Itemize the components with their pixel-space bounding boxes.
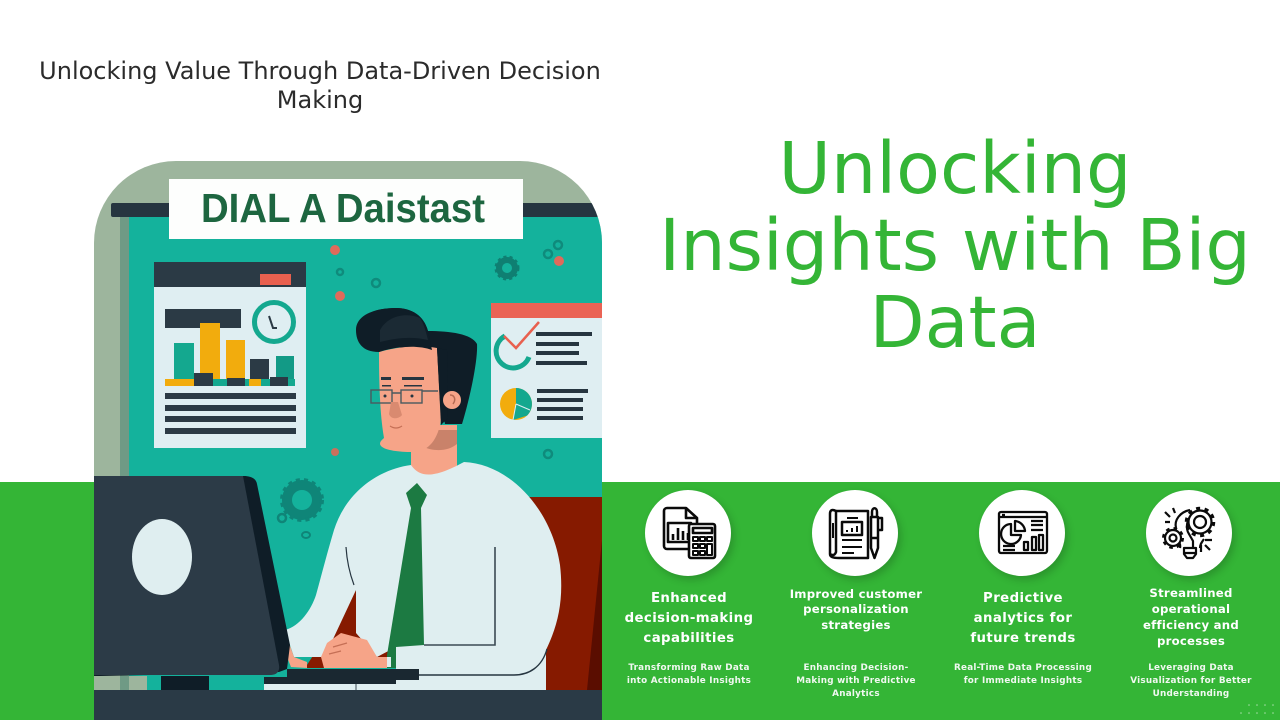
description 1 — [627, 662, 751, 686]
laptop — [94, 476, 290, 676]
heading 1: capabilities — [643, 631, 735, 646]
subtitle heading: Making — [277, 86, 363, 114]
checklist panel — [491, 303, 602, 438]
chair — [305, 497, 602, 690]
description 2: Making with Predictive — [796, 676, 916, 686]
heading 2: personalization — [803, 602, 909, 616]
sign — [169, 179, 523, 239]
description 4: Understanding — [1153, 688, 1229, 698]
heading 3: Predictive — [983, 590, 1063, 606]
subtitle heading: Unlocking Value Through Data-Driven Decision — [39, 57, 601, 85]
heading 4: efficiency and — [1143, 618, 1239, 632]
heading 1 — [625, 590, 753, 646]
keyboard — [264, 669, 419, 684]
description 2 — [796, 662, 916, 698]
main title: Insights with Big — [659, 204, 1251, 287]
card 2 — [790, 490, 922, 698]
heading 3 — [970, 590, 1076, 646]
description 3: for Immediate Insights — [964, 676, 1082, 686]
description 2: Analytics — [832, 688, 880, 698]
heading 4 — [1143, 586, 1239, 648]
description 1: Transforming Raw Data — [628, 662, 750, 672]
heading 2 — [790, 586, 922, 632]
description 4: Leveraging Data — [1148, 662, 1234, 672]
card 4 — [1130, 490, 1252, 698]
heading 4: processes — [1157, 634, 1225, 648]
description 2: Enhancing Decision- — [803, 662, 909, 672]
desk strip and desk — [94, 676, 602, 720]
dashboard panel — [154, 262, 306, 448]
icon: analytics window — [979, 490, 1065, 576]
icon: document and pen — [812, 490, 898, 576]
main title: Unlocking — [778, 127, 1132, 210]
man — [264, 308, 561, 690]
icon: report and calculator — [645, 490, 731, 576]
description 1: into Actionable Insights — [627, 676, 751, 686]
background gears and dots — [278, 241, 564, 538]
main title: Data — [870, 281, 1040, 364]
main title — [659, 127, 1251, 364]
subtitle heading — [39, 57, 601, 114]
green band — [0, 482, 1280, 720]
description 3 — [954, 662, 1092, 686]
description 4: Visualization for Better — [1130, 676, 1252, 686]
description 4 — [1130, 662, 1252, 698]
heading 2: strategies — [821, 618, 891, 632]
heading 3: analytics for — [974, 611, 1072, 626]
heading 2: Improved customer — [790, 586, 922, 600]
description 3: Real-Time Data Processing — [954, 662, 1092, 672]
icon: lightbulb and gears — [1146, 490, 1232, 576]
illustration: analyst at laptop — [94, 161, 602, 720]
heading 4: operational — [1152, 602, 1230, 616]
dot pattern — [1240, 704, 1274, 714]
card 3 — [954, 490, 1092, 686]
heading 1: Enhanced — [651, 590, 727, 606]
heading 3: future trends — [970, 631, 1076, 646]
sign: DIAL A Daistast — [201, 185, 485, 231]
heading 4: Streamlined — [1149, 586, 1233, 600]
card 1 — [625, 490, 753, 686]
heading 1: decision-making — [625, 611, 753, 626]
